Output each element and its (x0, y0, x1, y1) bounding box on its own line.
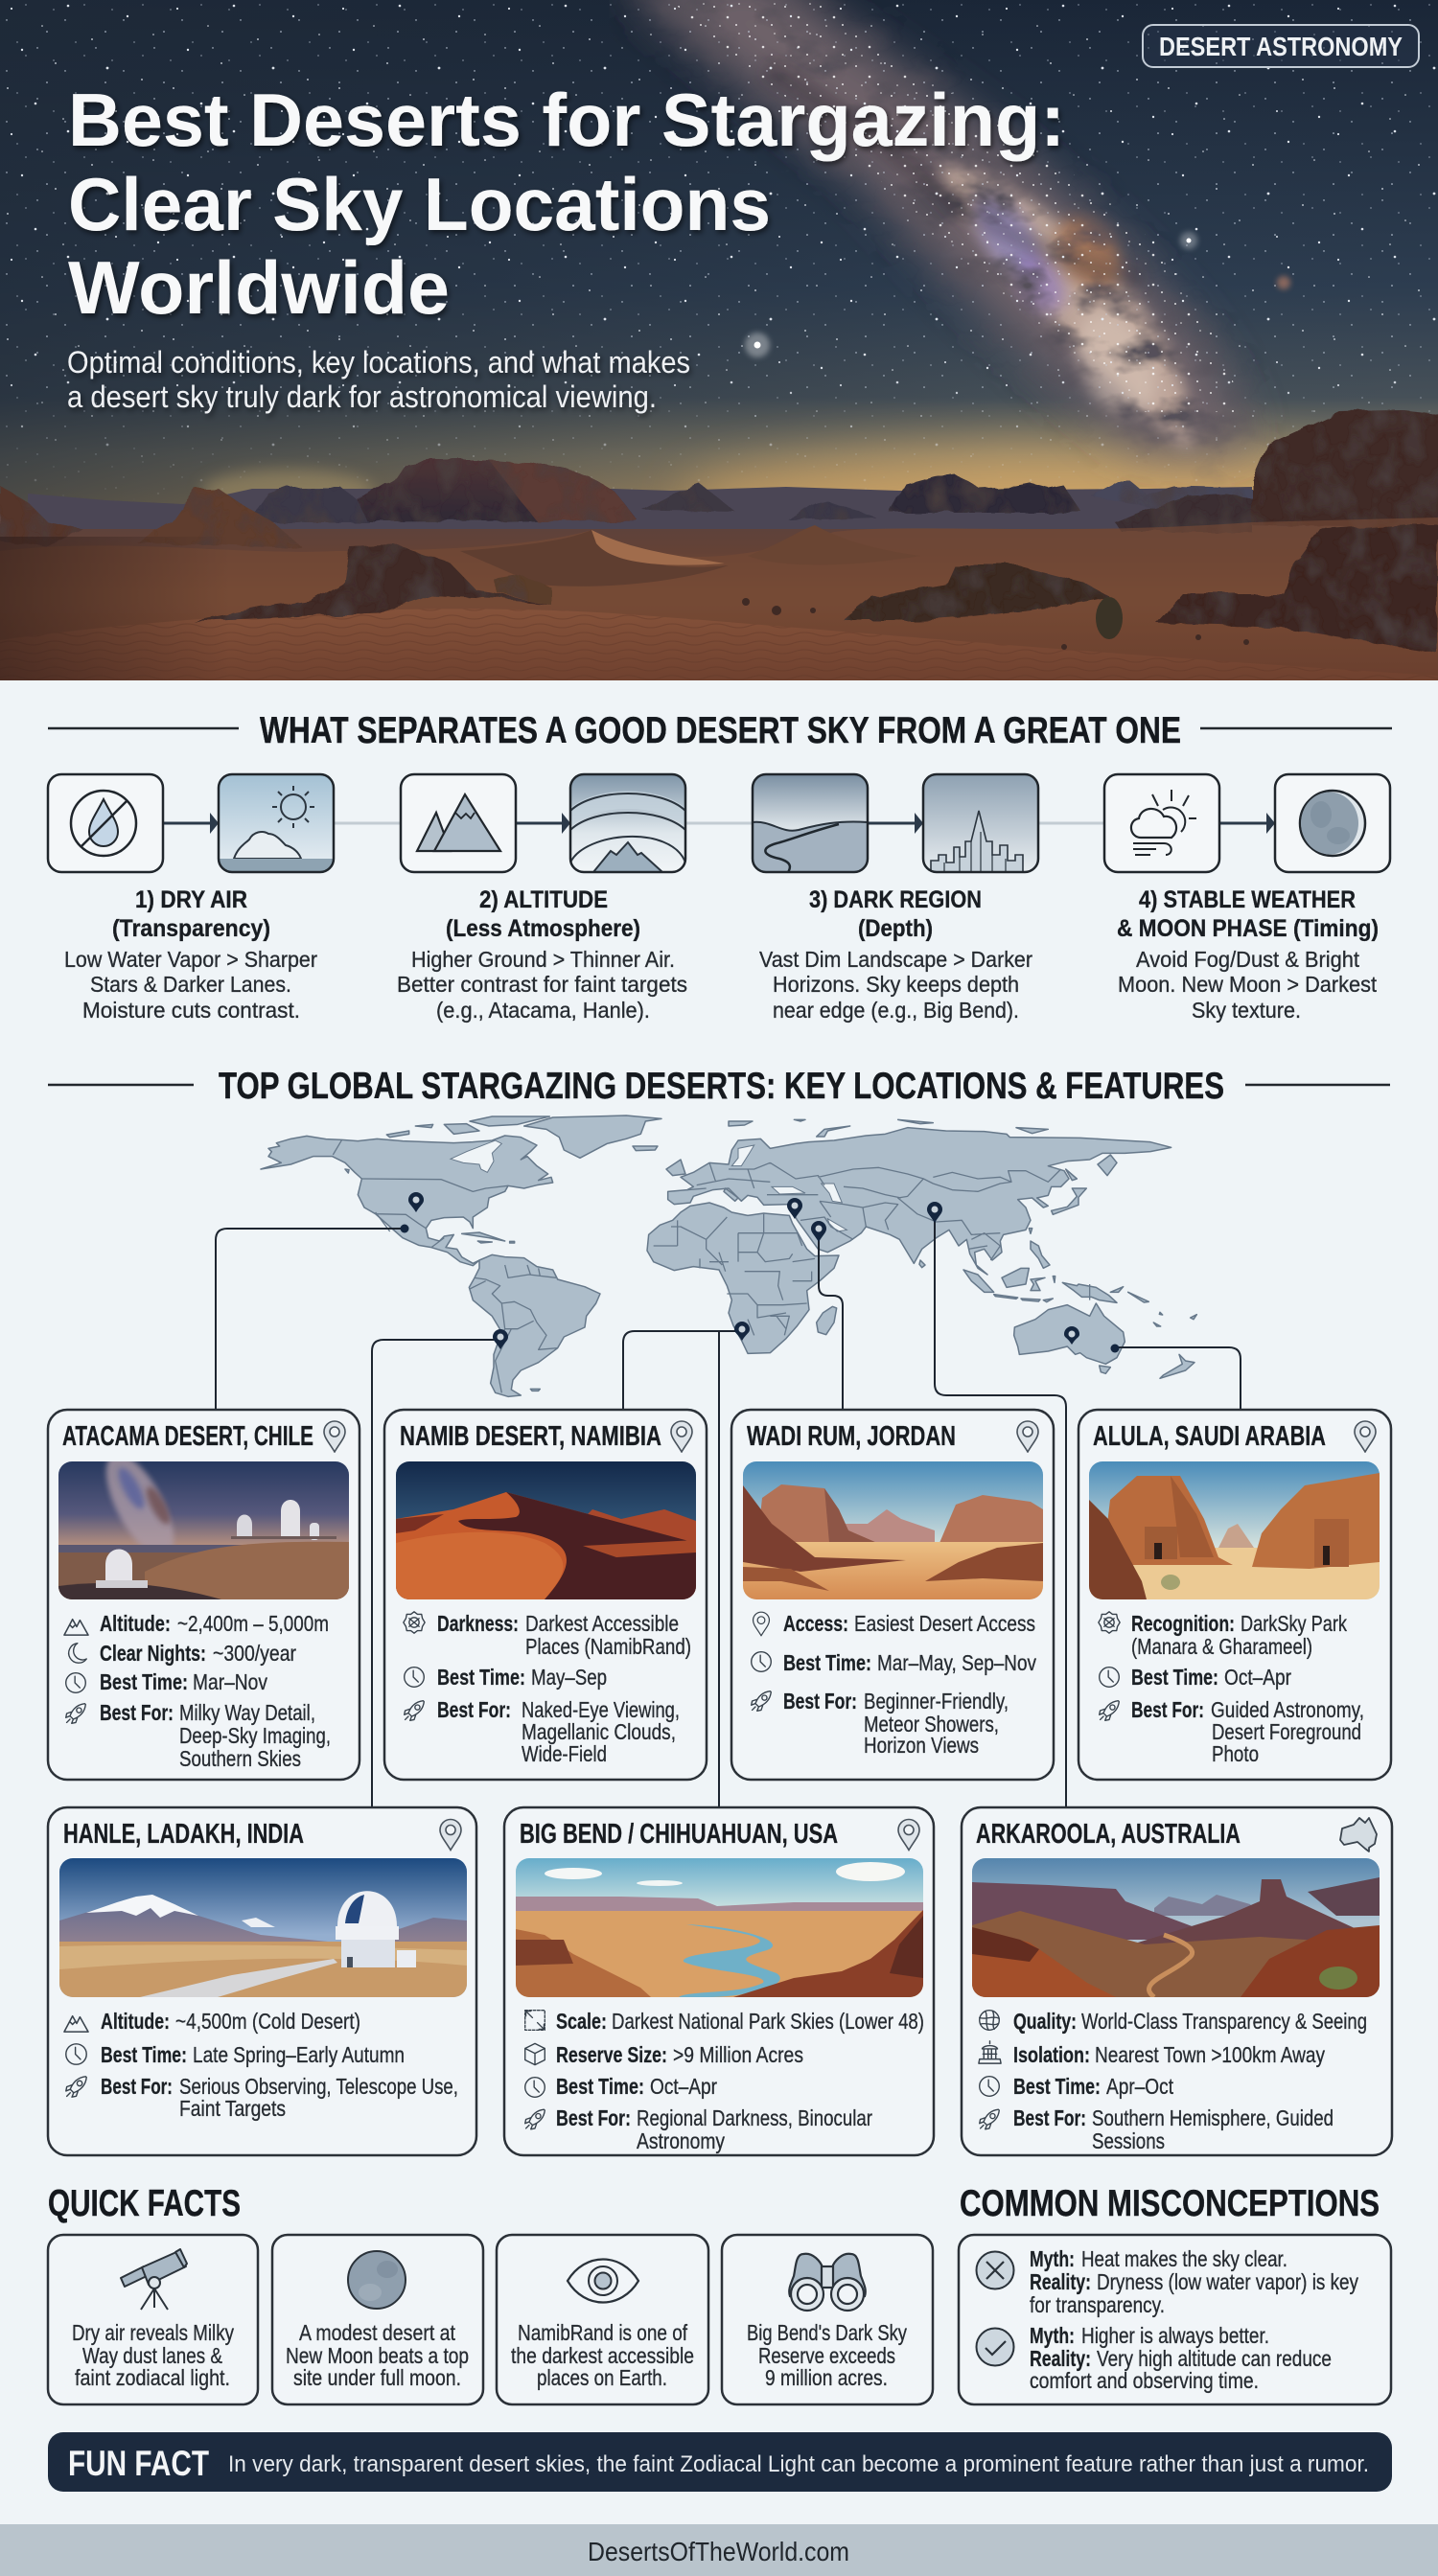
subtitle: Optimal conditions, key locations, and what makes (67, 345, 690, 380)
fun fact banner: In very dark, transparent desert skies, the faint Zodiacal Light can become a prominent feature rather than just a rumor. (228, 2451, 1369, 2477)
footer: DesertsOfTheWorld.com (588, 2537, 849, 2566)
misconceptions panel: Heat makes the sky clear. (1081, 2246, 1287, 2271)
factor 2 text: (Less Atmosphere) (446, 915, 640, 942)
card facts: Mar–May, Sep–Nov (877, 1650, 1036, 1675)
card facts: Naked-Eye Viewing, (522, 1697, 680, 1722)
card facts: Clear Nights: (100, 1641, 206, 1666)
factor 4 text: Sky texture. (1192, 998, 1301, 1023)
misconceptions panel: Higher is always better. (1081, 2323, 1269, 2348)
card facts: ~4,500m (Cold Desert) (175, 2009, 360, 2034)
factor 4 text: Moon. New Moon > Darkest (1118, 972, 1377, 997)
card facts: Desert Foreground (1212, 1719, 1361, 1744)
icon: reality check (976, 2329, 1014, 2365)
footer (0, 2524, 1438, 2576)
card facts: Best Time: (101, 2042, 187, 2067)
card title: HANLE, LADAKH, INDIA (63, 1819, 304, 1850)
card title: NAMIB DESERT, NAMIBIA (400, 1421, 661, 1452)
card facts (64, 2009, 458, 2121)
misconceptions panel: Reality: (1030, 2269, 1091, 2294)
card facts: (Manara & Gharameel) (1131, 1634, 1312, 1659)
card facts: Best Time: (1013, 2074, 1101, 2099)
factor 1 text: Moisture cuts contrast. (82, 998, 300, 1023)
main title: Clear Sky Locations (68, 162, 771, 246)
card facts: DarkSky Park (1241, 1611, 1347, 1636)
misconceptions panel: Reality: (1030, 2346, 1091, 2371)
card facts: Deep-Sky Imaging, (179, 1723, 331, 1748)
card title: WADI RUM, JORDAN (747, 1421, 956, 1452)
factor 3 text: 3) DARK REGION (809, 886, 982, 913)
quick fact: eye: NamibRand is one of (518, 2320, 687, 2345)
factor 2 text: Better contrast for faint targets (397, 972, 687, 997)
quick fact: moon: A modest desert at (299, 2320, 455, 2345)
misconceptions panel: comfort and observing time. (1030, 2368, 1259, 2393)
main title (68, 78, 1065, 330)
card facts: Oct–Apr (650, 2074, 717, 2099)
card title: BIG BEND / CHIHUAHUAN, USA (520, 1819, 838, 1850)
icon: Australia outline (1340, 1818, 1377, 1852)
card facts: Darkness: (437, 1611, 519, 1636)
hero badge (1143, 25, 1419, 67)
factor 3 text (759, 886, 1032, 1023)
card facts: Beginner-Friendly, (864, 1689, 1009, 1714)
card: Atacama (48, 1410, 360, 1780)
quick fact: binoculars (722, 2235, 933, 2404)
misconceptions panel: Myth: (1030, 2246, 1075, 2271)
hero banner: desert night sky (0, 0, 1438, 680)
card facts: Mar–Nov (193, 1669, 267, 1694)
factor 1 text: 1) DRY AIR (135, 886, 247, 913)
card facts (1099, 1611, 1364, 1766)
card facts: >9 Million Acres (673, 2042, 803, 2067)
card facts: Southern Skies (179, 1746, 301, 1771)
map connector lines (216, 1220, 1241, 1807)
card facts: Reserve Size: (556, 2042, 667, 2067)
quick fact: telescope: Way dust lanes & (82, 2343, 222, 2368)
card facts: Quality: (1013, 2009, 1077, 2034)
card facts: Horizon Views (864, 1733, 979, 1758)
factor 1 text: (Transparency) (112, 915, 270, 942)
card facts: Best Time: (100, 1669, 188, 1694)
card facts: Scale: (556, 2009, 607, 2034)
quick fact: moon (272, 2235, 483, 2404)
map: Americas (261, 1116, 661, 1396)
map: Europe, Africa, Asia, Oceania (647, 1119, 1196, 1378)
subtitle: a desert sky truly dark for astronomical viewing. (67, 380, 657, 414)
card facts: Recognition: (1131, 1611, 1235, 1636)
card facts (525, 2009, 924, 2153)
card facts (64, 1611, 331, 1771)
icon: no moisture (48, 774, 163, 872)
fun fact banner (48, 2432, 1392, 2492)
quick fact: eye: the darkest accessible (511, 2343, 694, 2368)
quick fact: telescope: Dry air reveals Milky (72, 2320, 234, 2345)
subtitle (67, 345, 690, 414)
factor 2 text (397, 886, 687, 1023)
card facts (752, 1611, 1036, 1758)
card facts: Regional Darkness, Binocular (637, 2105, 872, 2130)
card facts: May–Sep (531, 1665, 607, 1690)
card facts: ~2,400m – 5,000m (177, 1611, 329, 1636)
factor 2 text: (e.g., Atacama, Hanle). (436, 998, 650, 1023)
card facts: Darkest Accessible (525, 1611, 679, 1636)
world map (261, 1116, 1196, 1396)
misconceptions panel: Very high altitude can reduce (1097, 2346, 1332, 2371)
card facts: Southern Hemisphere, Guided (1092, 2105, 1334, 2130)
card facts (979, 2009, 1367, 2153)
factor 1 text: Low Water Vapor > Sharper (64, 947, 317, 972)
icon: moon phase (1275, 774, 1390, 872)
factor 1 text (64, 886, 317, 1023)
icon: weather (1104, 774, 1219, 872)
factor 3 text: near edge (e.g., Big Bend). (773, 998, 1019, 1023)
card facts: Photo (1212, 1741, 1259, 1766)
icon: clear sky with sun and cloud (219, 774, 334, 872)
card facts: Easiest Desert Access (854, 1611, 1035, 1636)
card facts: Best For: (100, 1700, 174, 1725)
factor 3 text: Horizons. Sky keeps depth (773, 972, 1019, 997)
card facts: Altitude: (101, 2009, 170, 2034)
factor connector lines and arrows (163, 813, 1275, 834)
card facts: Best Time: (437, 1665, 525, 1690)
map pins (401, 1192, 1120, 1353)
card facts: Milky Way Detail, (179, 1700, 315, 1725)
icon: dim landscape (753, 774, 868, 874)
card title: ATACAMA DESERT, CHILE (62, 1421, 313, 1452)
misconceptions panel: for transparency. (1030, 2292, 1165, 2317)
icon: atmosphere layers (566, 774, 690, 872)
card facts: Magellanic Clouds, (522, 1719, 676, 1744)
quick fact: eye (497, 2235, 708, 2404)
card: Wadi Rum (731, 1410, 1054, 1780)
quick fact: moon: site under full moon. (293, 2365, 461, 2390)
card facts: Best Time: (1131, 1665, 1218, 1690)
quick fact: binoculars: 9 million acres. (765, 2365, 888, 2390)
card facts: Best For: (1131, 1697, 1204, 1722)
quick fact: moon: New Moon beats a top (286, 2343, 469, 2368)
card title: ALULA, SAUDI ARABIA (1093, 1421, 1326, 1452)
quick fact: telescope: faint zodiacal light. (75, 2365, 230, 2390)
card facts: Guided Astronomy, (1211, 1697, 1364, 1722)
icon: myth cross (976, 2252, 1014, 2288)
misconceptions panel (959, 2235, 1391, 2404)
card title: ARKAROOLA, AUSTRALIA (976, 1819, 1241, 1850)
card facts: Altitude: (100, 1611, 171, 1636)
factor 2 text: 2) ALTITUDE (479, 886, 608, 913)
card facts: World-Class Transparency & Seeing (1081, 2009, 1367, 2034)
main title: Best Deserts for Stargazing: (68, 78, 1065, 162)
icon: distant city glow (923, 774, 1038, 872)
factor 3 text: Vast Dim Landscape > Darker (759, 947, 1032, 972)
card facts: Best For: (101, 2074, 173, 2099)
quick fact: binoculars: Reserve exceeds (758, 2343, 895, 2368)
card facts: Best For: (556, 2105, 631, 2130)
factor 4 text: 4) STABLE WEATHER (1139, 886, 1356, 913)
card facts: Best For: (1013, 2105, 1086, 2130)
misconceptions panel: Dryness (low water vapor) is key (1097, 2269, 1358, 2294)
card facts: Places (NamibRand) (525, 1634, 691, 1659)
card facts: Best Time: (783, 1650, 871, 1675)
card facts (404, 1611, 691, 1766)
factor 3 text: (Depth) (858, 915, 933, 942)
factor 4 text (1117, 886, 1379, 1023)
card: Big Bend (504, 1807, 934, 2155)
main title: Worldwide (68, 245, 450, 330)
card facts: Best For: (437, 1697, 511, 1722)
card facts: Isolation: (1013, 2042, 1090, 2067)
card facts: Wide-Field (522, 1741, 607, 1766)
heading: quick facts: QUICK FACTS (48, 2183, 241, 2224)
card facts: Access: (783, 1611, 848, 1636)
card: Arkaroola (962, 1807, 1392, 2155)
card facts: Nearest Town >100km Away (1095, 2042, 1325, 2067)
misconceptions panel: Myth: (1030, 2323, 1075, 2348)
card: Namib (384, 1410, 707, 1780)
quick fact: telescope (48, 2235, 258, 2404)
factor 4 text: & MOON PHASE (Timing) (1117, 915, 1379, 942)
card facts: Best Time: (556, 2074, 644, 2099)
factor 2 text: Higher Ground > Thinner Air. (411, 947, 675, 972)
fun fact banner: FUN FACT (68, 2444, 209, 2483)
card facts: Late Spring–Early Autumn (193, 2042, 405, 2067)
card facts: Darkest National Park Skies (Lower 48) (612, 2009, 924, 2034)
factor 1 text: Stars & Darker Lanes. (90, 972, 291, 997)
card facts: Apr–Oct (1106, 2074, 1173, 2099)
card facts: Meteor Showers, (864, 1712, 999, 1736)
quick fact: binoculars: Big Bend's Dark Sky (747, 2320, 907, 2345)
icon: mountains (401, 774, 516, 872)
card facts: Best For: (783, 1689, 857, 1714)
card facts: Serious Observing, Telescope Use, (179, 2074, 458, 2099)
factor 4 text: Avoid Fog/Dust & Bright (1136, 947, 1359, 972)
card facts: Oct–Apr (1224, 1665, 1291, 1690)
card facts: Faint Targets (179, 2096, 286, 2121)
card: Hanle (48, 1807, 476, 2155)
quick fact: eye: places on Earth. (537, 2365, 667, 2390)
heading: what separates: WHAT SEPARATES A GOOD DESERT SKY FROM A GREAT ONE (260, 710, 1181, 751)
card: AlUla (1078, 1410, 1391, 1780)
card facts: Astronomy (637, 2128, 725, 2153)
card facts: ~300/year (213, 1641, 296, 1666)
card facts: Sessions (1092, 2128, 1165, 2153)
